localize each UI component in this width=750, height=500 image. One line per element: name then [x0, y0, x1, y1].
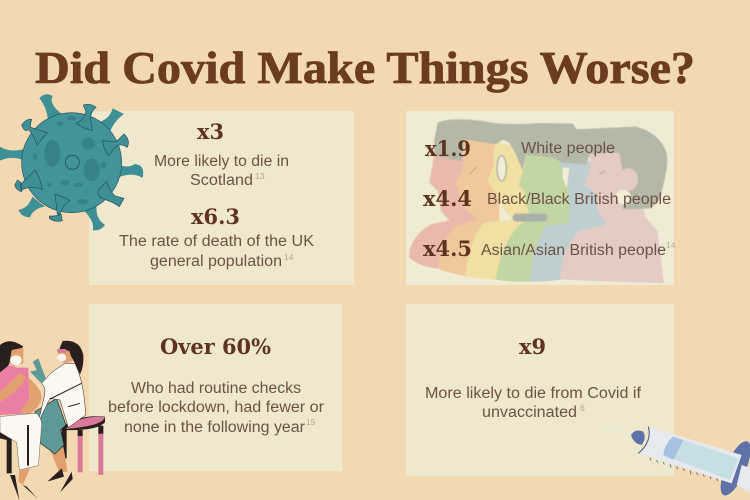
stat: x4.5 Asian/Asian British people: Asian/Asian British people — [481, 242, 666, 259]
text: unvaccinated description — [425, 385, 642, 421]
icon: virus — [0, 94, 143, 230]
nurse — [30, 341, 86, 492]
text: rate of death: general population — [150, 253, 282, 270]
text: more likely to die in Scotland: 13 — [255, 171, 265, 181]
stat: x4.4 Black/Black British people: Black/Black British people — [487, 191, 671, 208]
stat: x1.9 White people: x1.9 — [425, 136, 471, 161]
text: routine checks description: before lockdown, had fewer or — [108, 399, 324, 416]
stool — [62, 416, 105, 475]
title: Did Covid Make Things Worse? — [35, 42, 695, 93]
illustration: pastel faces in profile — [406, 119, 667, 288]
text: rate of death — [119, 233, 315, 270]
text: unvaccinated description: unvaccinated — [482, 404, 577, 421]
patient chair — [0, 432, 12, 473]
stat: x6.3: x6.3 — [191, 204, 240, 229]
text: unvaccinated description: More likely to die from Covid if — [425, 385, 642, 402]
illustration: patient receiving a vaccine — [0, 341, 105, 500]
stat: x4.4 Black/Black British people: x4.4 — [423, 186, 472, 211]
text: unvaccinated description: 6 — [580, 403, 585, 413]
stat: x9: x9 — [519, 334, 546, 359]
text: routine checks description: 15 — [306, 417, 316, 427]
stat: Over 60%: Over 60% — [160, 334, 271, 359]
stat: x3: x3 — [197, 119, 224, 144]
stat: x4.5 Asian/Asian British people: x4.5 — [423, 236, 472, 261]
text: rate of death: 14 — [284, 252, 294, 262]
text: rate of death: The rate of death of the UK — [119, 233, 315, 250]
text: routine checks description: none in the following year — [124, 419, 305, 436]
icon: syringe — [598, 423, 750, 499]
text: routine checks description — [108, 380, 324, 436]
text: routine checks description: Who had routine checks — [131, 380, 301, 397]
stat: x1.9 White people: White people — [521, 140, 615, 157]
stat: x4.5 Asian/Asian British people — [423, 236, 676, 261]
stat: x1.9 White people — [425, 136, 615, 161]
text: more likely to die in Scotland — [154, 153, 289, 189]
stat: x4.4 Black/Black British people — [423, 186, 671, 211]
stat: x4.5 Asian/Asian British people: 14 — [666, 240, 676, 250]
panel: ethnicity comparison — [406, 111, 676, 288]
text: more likely to die in Scotland: Scotland — [190, 172, 253, 189]
panel: routine checks — [89, 304, 342, 471]
panel: Scotland and UK death rates — [89, 111, 354, 285]
text: more likely to die in Scotland: More likely to die in — [154, 153, 289, 170]
patient — [0, 341, 42, 500]
panel: vaccination — [406, 304, 674, 476]
